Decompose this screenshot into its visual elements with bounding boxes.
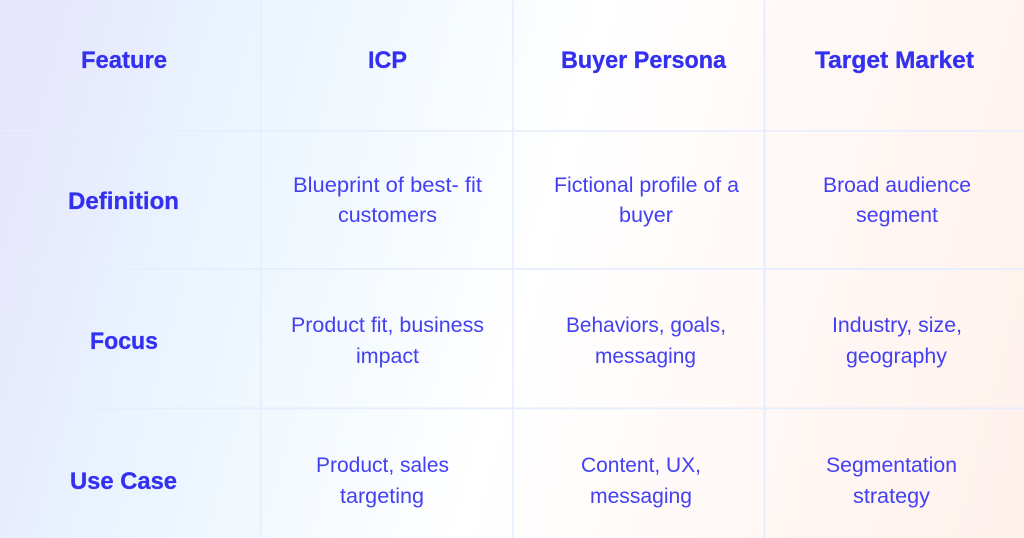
cell: Target Market focus: geography (846, 345, 948, 368)
row: Use Case (70, 454, 957, 508)
row: Focus (90, 314, 962, 368)
heading: Target Market: Target Market (815, 47, 974, 74)
cell: Buyer Persona definition: Fictional profile of a (554, 174, 739, 197)
cell: Target Market use case (826, 454, 957, 508)
heading: ICP: ICP (368, 47, 407, 74)
header row (81, 47, 974, 74)
cell: ICP use case: Product, sales (316, 454, 449, 477)
heading: Feature: Feature (81, 47, 167, 74)
cell: Target Market definition: segment (856, 204, 938, 227)
cell: Target Market focus: Industry, size, (832, 314, 962, 337)
cell: Buyer Persona definition: buyer (619, 204, 673, 227)
row label: Definition: Definition (68, 188, 179, 215)
cell: Buyer Persona focus: Behaviors, goals, (566, 314, 726, 337)
row label: Focus: Focus (90, 328, 158, 355)
cell: ICP use case: targeting (340, 485, 424, 508)
heading: Buyer Persona: Buyer Persona (561, 47, 727, 74)
cell: Buyer Persona use case (581, 454, 701, 508)
cell: ICP focus (291, 314, 484, 368)
cell: ICP focus: impact (356, 345, 419, 368)
cell: ICP definition (293, 174, 482, 227)
cell: Target Market use case: strategy (853, 485, 931, 508)
cell: Buyer Persona focus (566, 314, 726, 368)
cell: Buyer Persona use case: messaging (590, 485, 692, 508)
cell: Target Market focus (832, 314, 962, 368)
cell: Target Market use case: Segmentation (826, 454, 957, 477)
cell: ICP definition: Blueprint of best- fit (293, 174, 482, 197)
cell: Target Market definition (823, 174, 971, 227)
cell: ICP use case (316, 454, 449, 508)
cell: Target Market definition: Broad audience (823, 174, 971, 197)
cell: ICP focus: Product fit, business (291, 314, 484, 337)
row: Definition (68, 174, 971, 227)
cell: Buyer Persona definition (554, 174, 739, 227)
row label: Use Case: Use Case (70, 468, 177, 495)
cell: Buyer Persona focus: messaging (595, 345, 696, 368)
cell: ICP definition: customers (338, 204, 437, 227)
cell: Buyer Persona use case: Content, UX, (581, 454, 701, 477)
